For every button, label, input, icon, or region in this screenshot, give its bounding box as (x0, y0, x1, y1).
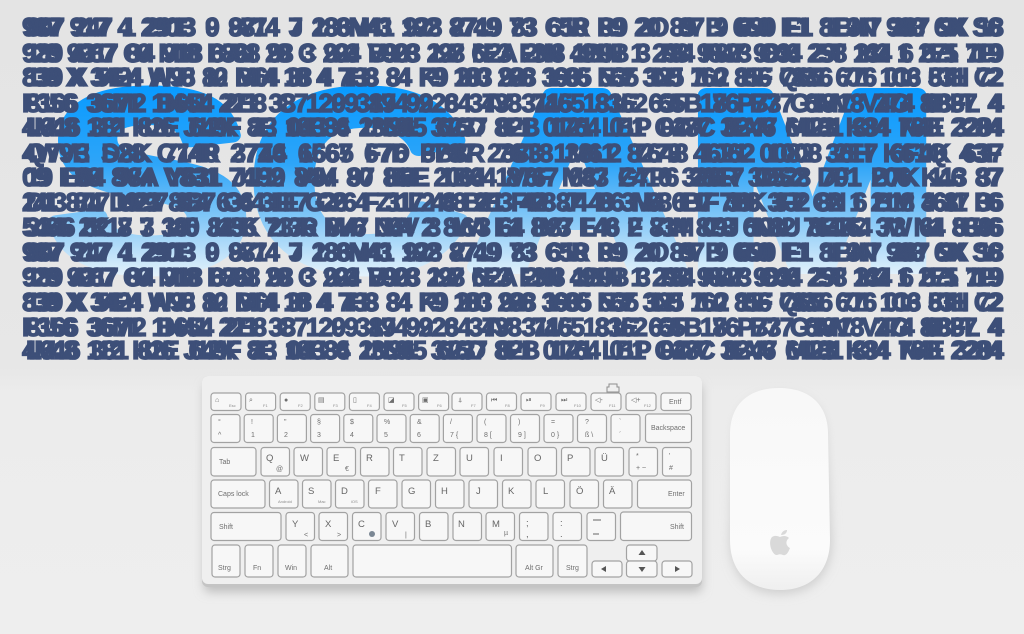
number rows: 09 E88 8V4 V831 74H9 V84 97 E6E 1B64 8767 647 G7P6 28E7 D528 7F1 206 K46 87 (22, 162, 1002, 192)
function key row: F12 (644, 403, 652, 408)
number rows: 4M16 381 82E 649F 23 04386 1N965 6237 62B 1764 01P 0287 3B46 6423 K34 76B 2284 (22, 112, 1003, 142)
keyboard (202, 376, 702, 592)
bottom key row: Alt (324, 565, 332, 572)
function key row: ◪ (388, 397, 395, 404)
number key row: ! (251, 419, 253, 426)
function key row: ⏭ (561, 397, 568, 404)
QWERTZ key row: + ~ (636, 465, 646, 472)
function key row: ● (284, 397, 288, 404)
YXCV key row: ; (526, 518, 529, 529)
function key row: F10 (574, 403, 582, 408)
ASDF key row: K (508, 486, 515, 497)
number rows: D13 817 U297 3B7 G64 1F7 C26 F 31L2 48 2E3 428 J4 B6 N68 E1F 38K 3J2 8N 6 B18 3611 B6 (26, 187, 1004, 217)
QWERTZ key row: R (366, 453, 373, 464)
QWERTZ key row: # (669, 465, 673, 472)
number key row: ° (218, 418, 221, 426)
QWERTZ key row: T (399, 453, 405, 464)
YXCV key row: V (392, 519, 399, 530)
mouse shadow (730, 394, 832, 594)
number rows: 807 247 1 2913 9 8714 J 186N43 192 8749 73 C18 R9 2O 87 9 690 F1 1BN7 287 9X 18 (26, 12, 1004, 42)
bottom key row: Strg (218, 565, 231, 572)
ASDF key row: iOS (351, 499, 358, 504)
function key row: F3 (333, 403, 338, 408)
YXCV key row: . (560, 529, 563, 540)
ASDF key row (211, 480, 692, 508)
function key row: F6 (437, 403, 442, 408)
big blue word: SCAM (48, 41, 938, 320)
QWERTZ key row: E (333, 453, 339, 464)
number key row: % (384, 419, 390, 426)
QWERTZ key row: € (345, 466, 349, 473)
icon: apple logo (770, 530, 790, 555)
bottom key row: Fn (253, 565, 261, 572)
QWERTZ key row: @ (276, 466, 283, 473)
number rows: 241 874 D923 8C4 634 3F1 G26 4 Z117 48 B21 F42 87 48 3M4 6B7 7B6 3F7 C2 1 21M 4687 36 (22, 187, 1002, 217)
number rows: 139 X 5424 AN5 80 B14 18 4 7H8 34 F9 180 286 3636 N35 12J 160 85F 7831 6J1 1C3 8T1 C2 (26, 62, 1004, 92)
number rows: 987 917 4 290B 0 9874 7 288M41 928 2719 83 65R 89 20 89 B 659 E1 8E3N 983 6X S6 (22, 237, 1002, 267)
function key row: ⌕ (249, 397, 253, 404)
number rows: 19 E84 98A Y631 J192 84V 80 86F 2064 1V6F M83 Z410 328R 3DS2 D01 B7K 113 37 (26, 162, 1004, 192)
number key row: ^ (218, 432, 222, 439)
bottom key row: Alt Gr (525, 565, 544, 572)
number key row: = (551, 419, 555, 426)
YXCV key row: X (325, 519, 332, 530)
ASDF key row: J (476, 486, 481, 497)
number rows: 807 247 1 2913 9 8714 J 186N43 192 8749 73 C18 R9 2O 87 9 690 F1 1BN7 287 9X 18 (26, 237, 1004, 267)
YXCV key row: Shift (219, 524, 233, 531)
YXCV key row: N (458, 519, 465, 530)
function key row: ▯ (353, 397, 357, 404)
number rows: 839 X 34E4 W98 12 M64 38 4 T33 84 K9 283 928 1965 567 3N5 7L2 116 Q656 776 016 53H 72 (22, 62, 1002, 92)
bottom key row: Strg (566, 565, 579, 572)
YXCV key row: µ (504, 530, 508, 537)
function key row: F11 (609, 403, 616, 408)
QWERTZ key row: ' (669, 453, 670, 460)
ASDF key row: S (308, 486, 314, 497)
function key row: ▣ (422, 397, 429, 404)
QWERTZ key row: P (567, 453, 573, 464)
function key row: F2 (298, 403, 303, 408)
QWERTZ key row (211, 448, 691, 476)
icon: printer (607, 384, 619, 392)
function key row: ▤ (318, 397, 325, 404)
function key row: ◁- (595, 397, 603, 404)
number key row: ) (518, 419, 520, 426)
number rows: 189 4317 89 M18 6891 29 C 924 B903 128 N2A 2N8 1B9B 3 784 F823 C46 25T 142 1 2E1 7F9 (26, 262, 1004, 292)
number rows: 839 X 34E4 W98 12 M64 38 4 T33 84 K9 283 928 1965 567 3N5 7L2 116 Q656 776 016 53H 72 (22, 287, 1002, 317)
function key row: Esc (229, 403, 236, 408)
function key row: ⍋ (458, 397, 462, 404)
number key row: Backspace (651, 425, 685, 432)
QWERTZ key row: I (500, 453, 503, 464)
QWERTZ key row: W (300, 453, 309, 464)
number key row: ? (585, 419, 589, 426)
ASDF key row: F (375, 486, 381, 497)
number key row: 7 { (450, 432, 459, 439)
number rows: 139 X 5424 AN5 80 B14 18 4 7H8 34 F9 180 286 3636 N35 12J 160 85F 7831 6J1 1C3 8T1 C2 (26, 287, 1004, 317)
number rows: F356 36M2 B654 2E8 C7 299 874 9284 738 7465 8362 65B 76 B37 6M18 274 6837 4 (22, 312, 1003, 342)
YXCV key row (211, 512, 692, 540)
YXCV key row: C (358, 519, 365, 530)
number rows: 928 9987 G4 918 B768 98 3 293 V928 297 6E3 F3N 491N 1 293 9847 9834 298 234 6 575 119 (22, 262, 1002, 292)
function key row: ⌂ (215, 397, 219, 404)
function key row: ◁+ (631, 397, 640, 404)
function key row: ⏮ (491, 397, 497, 404)
function key row: F8 (505, 403, 510, 408)
bottom key row: Win (285, 565, 297, 572)
number rows: Q7V3 D8K 7148 27Z4 1665 F76 FB8R 76T8 38L2 7648 1J62 1008 2E7 6F4K 637 (26, 138, 1004, 168)
number key row: § (317, 419, 321, 426)
number key row (211, 414, 692, 442)
mouse (730, 388, 832, 594)
YXCV key row: Y (292, 519, 299, 530)
function key row: Entf (669, 399, 682, 406)
QWERTZ key row: Q (266, 453, 273, 464)
number rows: F356 36M2 B654 2E8 C7 299 874 9284 738 7465 8362 65B 76 B37 6M18 274 6837 4 (22, 88, 1003, 118)
function key row: F1 (263, 403, 268, 408)
number rows: L648 112 H16 J12K 8E 18E34 2359L 316D 8F1 0121 LB1 G47C 82V7 M181 384 N4E 3284 (26, 335, 1005, 365)
number key row: 2 (284, 432, 288, 439)
number key row: 5 (384, 432, 388, 439)
function key row: ⏯ (526, 397, 532, 404)
YXCV key row: Shift (670, 524, 684, 531)
number key row: / (450, 419, 452, 426)
number key row: & (417, 419, 422, 426)
number rows: 3246 5217 3 180 8456 713R 8V6 N4V 3 164 E1 8V3 E43 F 714 8Z8 6N1U 8E164 73 N1 8E86 (26, 212, 1004, 242)
YXCV key row: | (405, 532, 407, 539)
number rows: 4M16 381 82E 649F 23 04386 1N965 6237 62B 1764 01P 0287 3B46 6423 K34 76B 2284 (22, 335, 1003, 365)
number key row: 1 (251, 432, 255, 439)
number key row: 9 ] (518, 432, 526, 439)
number key row: $ (350, 419, 354, 426)
number key row: 8 [ (484, 432, 492, 439)
bottom key row (212, 545, 692, 577)
ASDF key row: A (275, 486, 282, 497)
mouse body (730, 388, 830, 590)
number rows: 987 917 4 290B 0 9874 7 288M41 928 2719 83 65R 89 20 89 B 659 E1 8E3N 983 6X S6 (22, 12, 1002, 42)
YXCV key row: M (492, 519, 500, 530)
QWERTZ key row: Z (433, 453, 439, 464)
number rows: 8166 3671 1N41 221 38 120 319 9226 34V 3115 131E 63F 18 P77 G18V V4G 8BFL 4 (26, 88, 1005, 118)
YXCV key row: : (560, 518, 563, 529)
number key row: ß \ (585, 432, 593, 439)
QWERTZ key row: Tab (219, 459, 230, 466)
ASDF key row: Enter (668, 491, 685, 498)
number rows: 4W9E S28 C74R 3746 6567 67D 3787 2383 1M61 8273 4621 0082 36H K61Q 43F (22, 138, 1002, 168)
number rows: 928 9987 G4 918 B768 98 3 293 V928 297 6E3 F3N 491N 1 293 9847 9834 298 234 6 575 119 (22, 38, 1002, 68)
number key row: ( (484, 419, 487, 426)
QWERTZ key row: U (466, 453, 473, 464)
keyboard body (202, 376, 702, 584)
number rows: 8166 3671 1N41 221 38 120 319 9226 34V 3115 131E 63F 18 P77 G18V V4G 8BFL 4 (26, 312, 1005, 342)
function key row (211, 393, 691, 410)
QWERTZ key row: Ü (601, 453, 608, 464)
number key row: 3 (317, 432, 321, 439)
function key row: F7 (471, 403, 476, 408)
keyboard shadow (204, 384, 702, 592)
ASDF key row: L (543, 486, 548, 497)
number key row: " (284, 419, 287, 426)
keyboard edge (202, 376, 702, 587)
QWERTZ key row: O (534, 453, 541, 464)
ASDF key row: Mac (318, 499, 326, 504)
ASDF key row: Ä (609, 486, 616, 497)
number rows: 189 4317 89 M18 6891 29 C 924 B903 128 N2A 2N8 1B9B 3 784 F823 C46 25T 142 1 2E1 7F9 (26, 38, 1004, 68)
function key row: F4 (367, 403, 372, 408)
number key row: 6 (417, 432, 421, 439)
YXCV key row: < (304, 532, 308, 539)
number key row: 0 } (551, 432, 560, 439)
ASDF key row: G (408, 486, 415, 497)
function key row: F5 (402, 403, 407, 408)
YXCV key row: B (425, 519, 431, 530)
ASDF key row: Caps lock (218, 491, 249, 498)
ASDF key row: H (441, 486, 448, 497)
ASDF key row: Android (278, 499, 292, 504)
function key row: F9 (540, 403, 545, 408)
ASDF key row: Ö (576, 486, 583, 497)
number key row: ` (619, 419, 621, 426)
number rows: 5465 2K18 7 345 J13K 2376 M47 J64 2 8W3 64 B87 L46 2 83M 09J 1082 7647C 3W 64 5346 (22, 212, 1002, 242)
ASDF key row: D (341, 486, 348, 497)
number rows: L648 112 H16 J12K 8E 18E34 2359L 316D 8F1 0121 LB1 G47C 82V7 M181 384 N4E 3284 (26, 112, 1005, 142)
number key row: ´ (619, 432, 621, 439)
YXCV key row: > (337, 532, 341, 539)
number key row: 4 (350, 432, 354, 439)
number rows (22, 12, 1005, 365)
YXCV key row: , (526, 529, 529, 540)
QWERTZ key row: * (636, 453, 639, 460)
